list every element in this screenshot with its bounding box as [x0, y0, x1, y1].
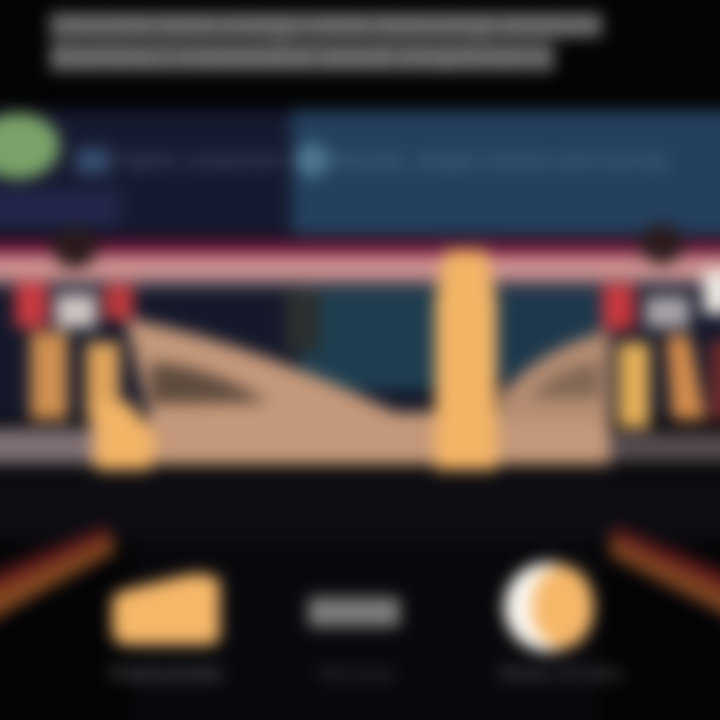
text: left stat label: Power punches — [108, 663, 223, 685]
ropes — [0, 240, 720, 289]
lower background — [0, 472, 720, 720]
icon: green badge — [0, 113, 60, 179]
title — [50, 12, 602, 72]
right diagonal stripe — [610, 526, 720, 628]
right fighter — [602, 224, 720, 428]
text: right caption: Rounds, weight classes and scoring — [335, 151, 665, 170]
panel: ring background — [0, 290, 720, 420]
ring floor — [0, 318, 720, 465]
text: centre value — [308, 597, 400, 627]
centre post — [435, 250, 497, 470]
panel: stat left — [108, 574, 223, 685]
title: Inside the ring: the boxing match — [52, 12, 597, 40]
icon: pie circle — [504, 562, 594, 652]
icon: small blue marker — [76, 148, 110, 174]
panel: stat centre — [308, 597, 400, 685]
text: right stat label: Share of wins — [498, 663, 623, 685]
panel: header band — [0, 110, 720, 236]
left fighter — [15, 228, 156, 470]
icon: light blue marker — [295, 143, 329, 177]
icon: orange block — [112, 574, 220, 645]
text: centre stat label: Versus — [318, 663, 393, 685]
title: Rules, rounds and fighters — [52, 44, 550, 72]
panel: stat right — [498, 562, 623, 685]
text: left caption: Fighter comparison — [118, 151, 283, 170]
left diagonal stripe — [0, 526, 116, 632]
